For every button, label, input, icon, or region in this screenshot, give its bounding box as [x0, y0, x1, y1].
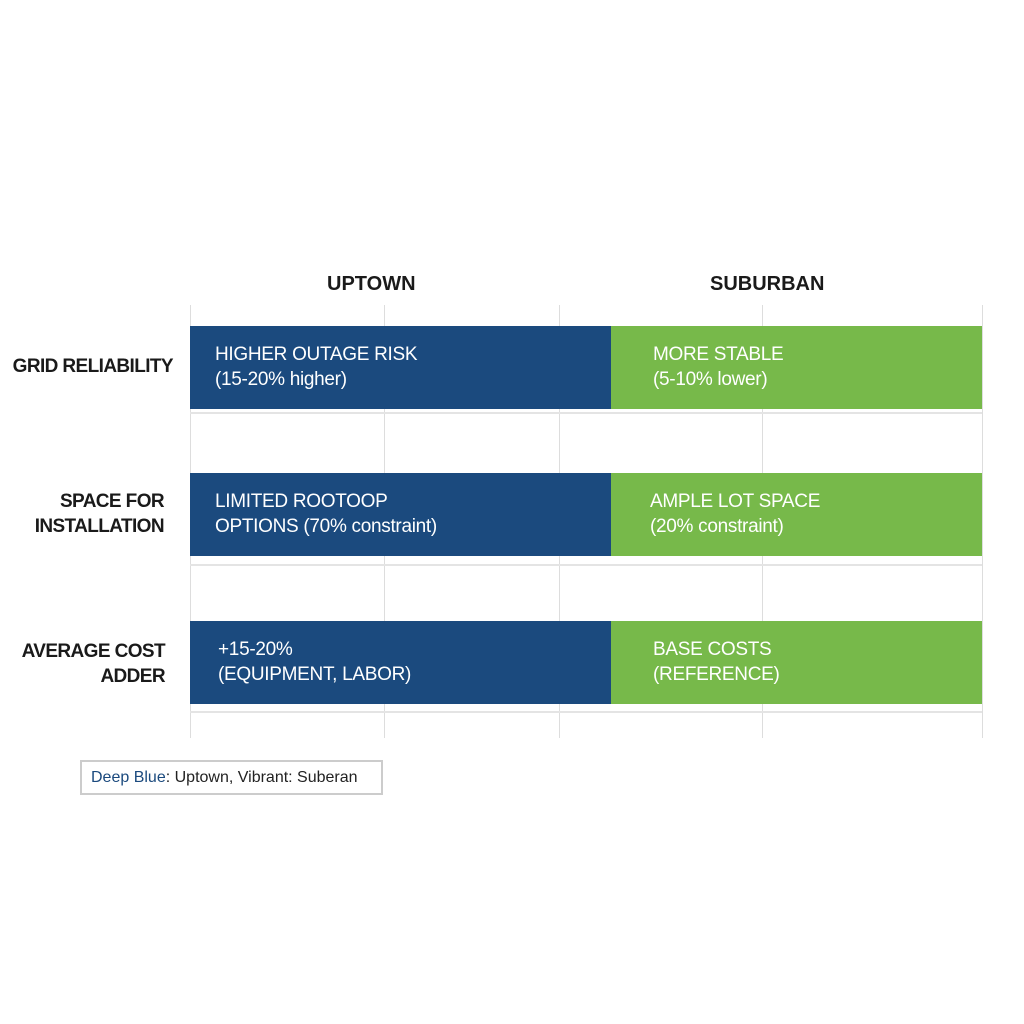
- legend: Deep Blue: Uptown, Vibrant: Suberan: [91, 769, 358, 786]
- row label: average cost adder: AVERAGE COST: [22, 641, 165, 662]
- bar: uptown grid: (15-20% higher): [215, 369, 347, 390]
- bar: uptown grid: [190, 326, 611, 409]
- bar: uptown grid: HIGHER OUTAGE RISK: [215, 344, 417, 365]
- bar: suburban cost: BASE COSTS: [653, 639, 771, 660]
- bar: suburban cost: (REFERENCE): [653, 664, 780, 685]
- bar: uptown space: LIMITED ROOTOOP: [215, 491, 388, 512]
- bar: uptown space: [190, 473, 611, 556]
- legend: [80, 760, 383, 795]
- bar: suburban grid: [611, 326, 982, 409]
- bar: suburban space: (20% constraint): [650, 516, 784, 537]
- heading: uptown: UPTOWN: [327, 273, 416, 295]
- bar: uptown cost: [190, 621, 611, 704]
- heading: suburban: SUBURBAN: [710, 273, 824, 295]
- row label: space for installation: [35, 491, 164, 537]
- bar: suburban grid: MORE STABLE: [653, 344, 783, 365]
- row label: space for installation: INSTALLATION: [35, 516, 164, 537]
- bar: suburban cost: [611, 621, 982, 704]
- bar: suburban grid: (5-10% lower): [653, 369, 767, 390]
- row label: average cost adder: ADDER: [100, 666, 165, 687]
- row label: grid reliability: GRID RELIABILITY: [13, 356, 173, 377]
- bar: uptown space: OPTIONS (70% constraint): [215, 516, 437, 537]
- bar: uptown cost: +15-20%: [218, 639, 292, 660]
- bar: suburban space: AMPLE LOT SPACE: [650, 491, 820, 512]
- bar: suburban space: [611, 473, 982, 556]
- row label: average cost adder: [22, 641, 166, 687]
- row label: space for installation: SPACE FOR: [60, 491, 164, 512]
- bar: uptown cost: (EQUIPMENT, LABOR): [218, 664, 411, 685]
